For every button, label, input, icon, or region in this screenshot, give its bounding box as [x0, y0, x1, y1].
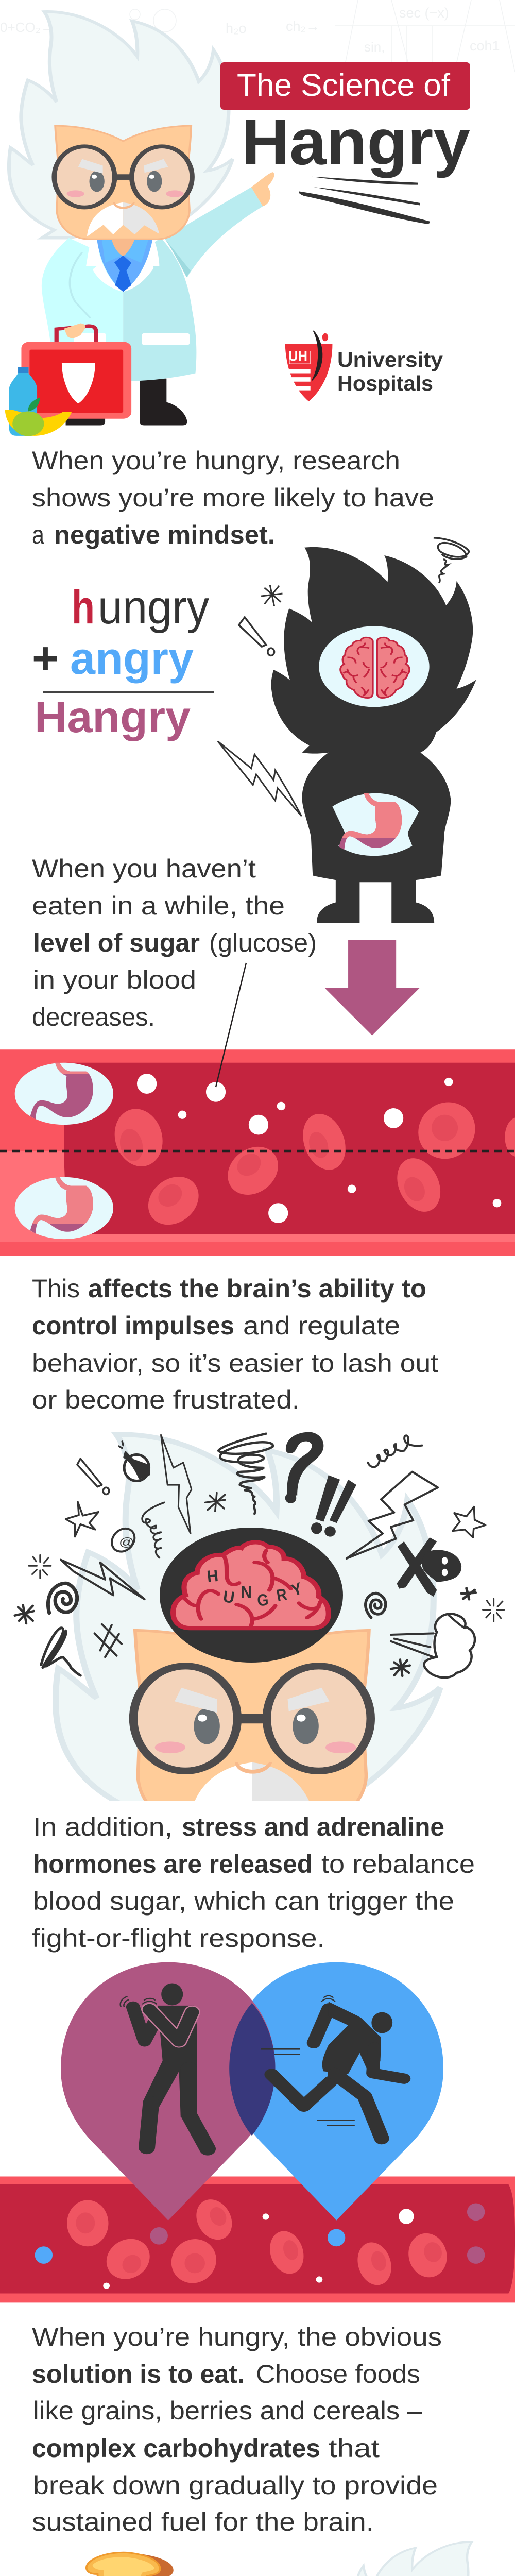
- word HUNGRY in brain: R: [275, 1585, 288, 1605]
- brain window: [319, 626, 430, 707]
- University Hospitals logo: UH: [288, 348, 307, 364]
- doodle: asterisk left: [15, 1605, 34, 1623]
- doodle: coil: [142, 1502, 164, 1557]
- callout line to glucose: [216, 963, 246, 1087]
- University Hospitals logo: [285, 331, 443, 401]
- faint math background: [0, 0, 515, 77]
- text: brain impulses: or become frustrated.: [32, 1385, 300, 1414]
- text: stress hormones: hormones are released: [33, 1850, 313, 1878]
- angry black silhouette with brain and stomach: [271, 547, 476, 923]
- stomach window: [332, 793, 419, 856]
- text: level of sugar: eaten in a while, the: [32, 891, 285, 920]
- text: eat complex carbs: sustained fuel for the brain.: [32, 2507, 374, 2536]
- scientist with first-aid case: [5, 12, 274, 436]
- text: stress hormones: to rebalance: [321, 1850, 475, 1878]
- full stomach: [15, 1063, 113, 1125]
- text: negative mindset: shows you’re more likely to have: [32, 483, 434, 512]
- empty stomach: [15, 1177, 113, 1239]
- blood vessel cross-section with stomachs: [0, 1049, 515, 1256]
- doodle: skull and bones: [397, 1537, 461, 1597]
- hungry word: ungry: [98, 581, 209, 634]
- doodle: star right: [453, 1506, 486, 1537]
- doodle: lightning: [161, 1435, 192, 1534]
- word HUNGRY in brain: [207, 1570, 300, 1606]
- faint math background: sec (−x): [399, 5, 449, 21]
- text: brain impulses: This: [32, 1274, 80, 1303]
- text: level of sugar: level of sugar: [33, 928, 200, 957]
- doodle: at sign: [108, 1526, 139, 1554]
- asterisk: [261, 585, 283, 606]
- doodle: spiral right: [366, 1593, 386, 1618]
- silhouette: [271, 547, 476, 923]
- doodle: exclamation: [77, 1459, 102, 1487]
- word HUNGRY in brain: G: [256, 1590, 269, 1609]
- text: brain impulses: control impulses: [32, 1311, 234, 1340]
- red blood cells: [110, 1099, 515, 1231]
- text: brain impulses: affects the brain’s ability to: [88, 1274, 426, 1303]
- text: eat complex carbs: When you’re hungry, the obvious: [32, 2323, 442, 2351]
- faint math background: coh1: [470, 38, 500, 54]
- text: stress hormones: fight-or-flight response.: [32, 1924, 325, 1953]
- doodle: star: [66, 1502, 98, 1537]
- faint math background: sin,: [364, 39, 385, 55]
- text: eat complex carbs: that: [329, 2434, 380, 2463]
- stomach half full: [339, 793, 402, 850]
- arrow: down: [324, 940, 420, 1036]
- figure: fighting: [133, 1983, 208, 2149]
- title banner: The Science of: [237, 67, 451, 103]
- icon: bread: [87, 2552, 174, 2576]
- doodle: large lightning: [347, 1472, 438, 1558]
- doodle: asterisk right: [461, 1588, 476, 1599]
- word HUNGRY in brain: Y: [289, 1579, 304, 1600]
- angry doodles around head: [15, 1432, 504, 1677]
- motion lines: [121, 1996, 355, 2126]
- dashed divider: [0, 1150, 515, 1152]
- text: eat complex carbs: complex carbohydrates: [32, 2434, 320, 2463]
- faint math background: h₂o: [226, 21, 247, 36]
- blood vessel 2: [0, 2176, 515, 2302]
- text: negative mindset: negative mindset.: [54, 520, 275, 549]
- glucose dots: [137, 1074, 501, 1223]
- doodle: double bang: [311, 1475, 356, 1537]
- text: eat complex carbs: solution is to eat.: [32, 2360, 245, 2388]
- doodle: bomb: [119, 1442, 149, 1481]
- doodle: hash: [95, 1624, 122, 1657]
- purple fight drop: [61, 1962, 275, 2221]
- overlap: [229, 2003, 275, 2136]
- text: stress hormones: blood sugar, which can trigger the: [33, 1887, 454, 1916]
- title banner: [220, 62, 470, 110]
- word HUNGRY in brain: U: [222, 1587, 236, 1607]
- dark brain circle: [160, 1528, 343, 1663]
- icons: healthy foods: [21, 2552, 342, 2576]
- doodle: asterisk: [205, 1493, 225, 1511]
- scientist 1 coat and pointing arm: [42, 172, 274, 381]
- text: level of sugar: When you haven’t: [32, 854, 256, 883]
- doodle: spiral left: [48, 1583, 77, 1613]
- title Hangry: Hangry: [242, 106, 470, 178]
- word HUNGRY in brain: N: [241, 1583, 252, 1601]
- hungry brain: [173, 1542, 329, 1628]
- exclamation mark: [239, 617, 266, 647]
- pink brain: [340, 637, 409, 698]
- text: level of sugar: in your blood: [33, 965, 196, 994]
- blood cells: [67, 2196, 450, 2287]
- text: eat complex carbs: like grains, berries and cereals –: [33, 2396, 422, 2425]
- doodle: question mark: [285, 1432, 323, 1503]
- University Hospitals logo: University: [337, 348, 443, 371]
- text: eat complex carbs: Choose foods: [256, 2360, 420, 2388]
- word HUNGRY in brain: H: [206, 1566, 219, 1586]
- University Hospitals logo: Hospitals: [337, 371, 433, 395]
- doodle: scribble left: [41, 1628, 80, 1675]
- figure: running: [271, 2002, 404, 2139]
- text: negative mindset: a: [32, 520, 44, 549]
- text: stress hormones: In addition,: [33, 1812, 173, 1841]
- angry doodles around head: @: [119, 1535, 134, 1549]
- text: eat complex carbs: break down gradually to provide: [33, 2471, 438, 2500]
- doodle: sparkle right: [483, 1599, 504, 1621]
- text: level of sugar: (glucose): [209, 928, 317, 957]
- doodle: tornado: [218, 1434, 273, 1514]
- logo shield: [285, 331, 332, 401]
- lightning bolt: [218, 741, 302, 816]
- plus angry: +: [32, 633, 59, 684]
- text: level of sugar: decreases.: [32, 1003, 155, 1031]
- plus angry: angry: [70, 633, 194, 684]
- big scientist head with hungry brain: [56, 1434, 440, 1826]
- text: negative mindset: When you’re hungry, research: [32, 446, 400, 475]
- fight and flight drops: [61, 1962, 443, 2221]
- Hangry result: Hangry: [35, 693, 191, 742]
- blue flight drop: [229, 1962, 443, 2221]
- equation: hungry + angry = Hangry: [32, 581, 214, 742]
- doodles around silhouette: [218, 538, 469, 816]
- doodle: asterisk low: [391, 1659, 410, 1676]
- doodle: left lightning: [61, 1560, 145, 1599]
- first-aid case: [21, 324, 131, 419]
- emphasis strokes: [299, 177, 430, 224]
- hormone dots: [150, 2204, 485, 2264]
- faint math background: 0+CO₂→: [0, 20, 54, 35]
- tornado: [434, 538, 469, 583]
- doodle: sparkle: [29, 1555, 51, 1578]
- scientist 1 legs: [66, 379, 187, 426]
- text: brain impulses: and regulate: [243, 1311, 400, 1340]
- scientist eating sandwich: [324, 2542, 494, 2576]
- text: stress hormones: stress and adrenaline: [182, 1812, 444, 1841]
- text: brain impulses: behavior, so it’s easier to lash out: [32, 1349, 438, 1378]
- doodle: curl scribble: [368, 1435, 422, 1467]
- water bottle and fruit: [5, 367, 72, 436]
- faint math background: ch₂→: [286, 19, 320, 34]
- hungry word: h: [72, 581, 95, 634]
- doodle: cloud puff: [424, 1614, 475, 1677]
